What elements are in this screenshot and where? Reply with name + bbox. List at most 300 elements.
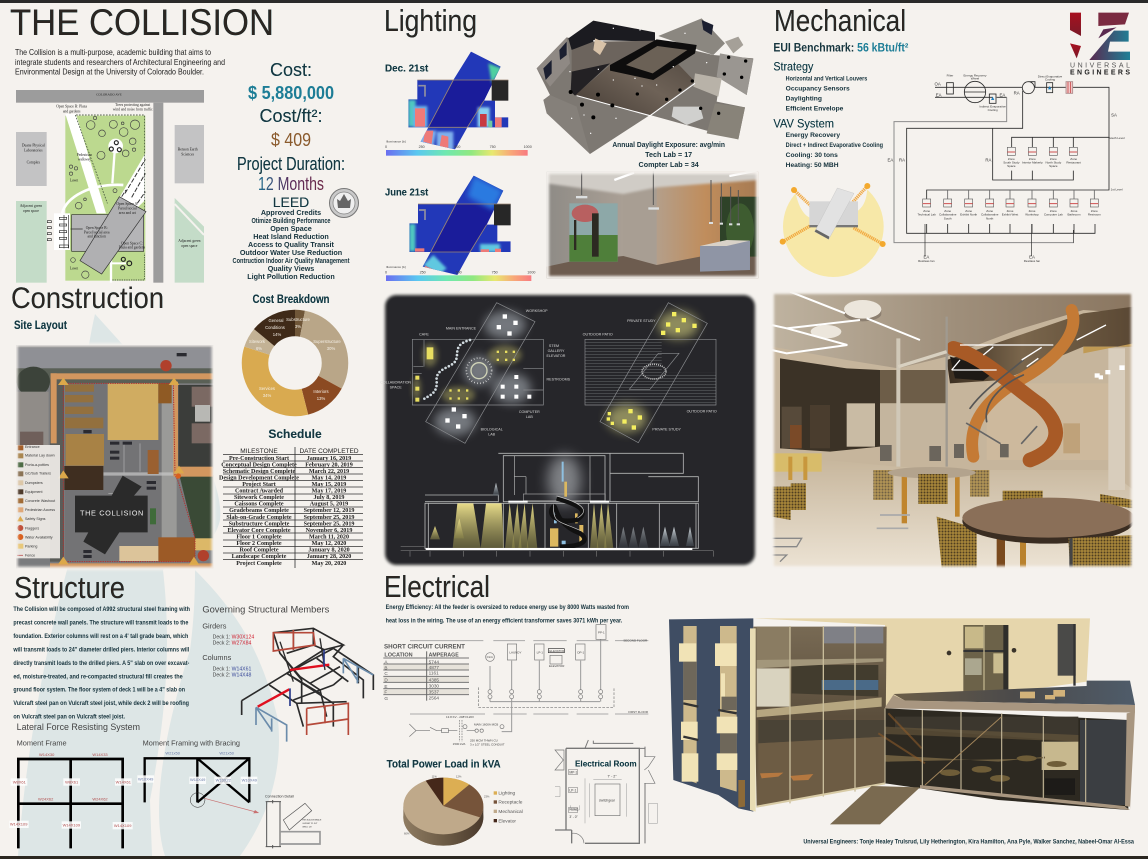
heading: Cost Breakdown: Cost Breakdown	[252, 292, 330, 306]
one-line diagram labels: DP-1	[577, 650, 584, 654]
LEED credits list: Approved Credits	[261, 208, 321, 217]
room labels: STEM	[549, 344, 559, 348]
donut chart: cost breakdown: 34%	[263, 393, 271, 398]
donut chart: cost breakdown	[249, 317, 341, 403]
energy efficiency text: Energy Efficiency: All the feeder is oversized to reduce energy use by 8000 Watts wasted from	[386, 604, 629, 611]
pie legend: Mechanical	[498, 809, 523, 815]
ceiling	[772, 292, 1133, 368]
schematic labels: Zone	[944, 209, 951, 213]
table: short circuit current: 2564	[429, 696, 439, 701]
lateral system headings	[17, 722, 240, 748]
back cream wall	[753, 618, 1090, 710]
donut chart: cost breakdown: Superstructure	[313, 339, 341, 344]
schematic labels: Zone	[965, 209, 972, 213]
room labels: COMPUTER	[519, 410, 540, 414]
site plan map: Open Space A:	[116, 202, 138, 206]
electrical room plan: MP-1	[569, 770, 577, 774]
label: December date: Dec. 21st	[385, 64, 429, 75]
room labels: SPACE	[390, 386, 402, 390]
table: short circuit current: 3030	[429, 684, 439, 689]
site plan map: Benson Earth	[178, 148, 198, 152]
upper windows	[947, 624, 1076, 692]
pie legend: Lighting	[498, 791, 516, 797]
table: project schedule: Project Complete	[236, 561, 282, 567]
table: short circuit current: 3537	[429, 689, 439, 694]
spiral stair	[953, 310, 1073, 460]
heading: Lighting: Lighting	[384, 3, 477, 38]
moment framing with bracing diagram: W10X49	[138, 777, 154, 782]
schematic labels: Space	[1049, 164, 1058, 168]
one-line diagram labels: 3 x 1/2" STEEL CONDUIT	[470, 742, 505, 746]
table: short circuit current: 1161	[429, 671, 439, 676]
electrical room plan: HVAC	[569, 808, 579, 812]
total cost value: $ 5,880,000	[248, 83, 334, 103]
schematic labels: Zone	[1007, 209, 1014, 213]
table: project schedule: January 28, 2020	[307, 554, 351, 560]
schematic labels: Zone	[986, 209, 993, 213]
electrical room plan: LP-1	[569, 789, 577, 793]
schematic labels: Zone	[1008, 157, 1015, 161]
table: project schedule: Conceptual Design Complete	[221, 462, 297, 468]
one-line diagram labels: PP-1	[598, 630, 605, 634]
table: project schedule: Slab-on-Grade Complete	[226, 515, 292, 521]
one-line diagram labels: MAIN 1600A MCB	[474, 722, 498, 726]
site plan map: Sciences	[181, 153, 195, 157]
schematic labels: Direct Evaporative	[1038, 74, 1063, 78]
panel: mechanical systems: RA	[1014, 91, 1020, 96]
structure paragraph: foundation. Exterior columns will rest on a 4' tall grade beam, which	[13, 633, 188, 640]
table: short circuit current: D	[384, 678, 388, 683]
table: project schedule	[219, 447, 363, 568]
map legend: Parking	[25, 544, 37, 548]
schematic labels	[918, 73, 1125, 263]
site plan map: Open Space B:	[86, 226, 108, 230]
governing structural members list	[202, 605, 330, 678]
site plan map: Open Space B: Plaza	[56, 104, 87, 108]
map legend: GC/Sub Trailers	[25, 472, 51, 476]
schematic labels: Zone	[1091, 209, 1098, 213]
VAV system list: VAV System	[773, 117, 834, 130]
electrical room plan	[555, 740, 657, 843]
color scale: June	[385, 265, 535, 281]
room labels: RESTROOMS	[547, 378, 571, 382]
schematic labels: Zone	[1029, 209, 1036, 213]
pie chart: total power load: 60%	[404, 832, 410, 836]
intro text block	[15, 47, 225, 76]
table: project schedule: MILESTONE	[240, 448, 278, 455]
site plan map: and function	[87, 235, 106, 239]
site plan map: Adjacent green	[20, 204, 42, 208]
panel: mechanical systems: EA	[887, 158, 893, 163]
schematic labels: Zone	[1050, 157, 1057, 161]
site plan map: Adjacent green	[178, 239, 201, 243]
one-line diagram labels: 250 MCM THWN CU	[470, 738, 498, 742]
site plan map: area and art	[119, 211, 136, 215]
site plan map: Duane Physical	[22, 144, 45, 148]
moment frame diagram: W24X62	[92, 797, 108, 802]
site plan map: wind and noise from traffic	[113, 108, 153, 112]
structure paragraph: directly transmit loads to the drilled piers. A 5" slab on over excavat-	[13, 660, 189, 667]
site plan map: open space	[181, 244, 198, 248]
3D structural frame	[242, 628, 373, 742]
moment frame diagram: W14X61	[116, 779, 132, 784]
site plan map: Trees protecting against	[115, 103, 150, 107]
table: project schedule: Design Development Complete	[219, 476, 299, 482]
LEED credits list: Quality Views	[268, 264, 314, 273]
cost label: Cost:	[270, 60, 312, 80]
map legend: Concrete Washout	[25, 499, 55, 503]
sun path building diagram	[780, 173, 886, 277]
room labels: GALLERY	[548, 349, 565, 353]
table: short circuit current: AMPERAGE	[429, 652, 459, 658]
blue side facade	[669, 618, 753, 812]
moment frame diagram: W14X33	[92, 752, 108, 757]
heading: Electrical: Electrical	[384, 569, 490, 604]
table: project schedule: Substructure Complete	[229, 522, 290, 528]
moment frame diagram: W8X61	[65, 779, 79, 784]
table: short circuit current: C	[384, 671, 388, 676]
structure paragraph: Vulcraft steel pan on Vulcraft steel joist, while deck 2 will be roofing	[13, 700, 189, 707]
structure paragraph: The Collision will be composed of A992 structural steel framing with	[13, 606, 190, 613]
moment frame diagram	[9, 752, 133, 848]
color scale: June: 750	[492, 270, 498, 274]
picture of trees	[569, 203, 618, 262]
structure paragraph: precast concrete wall panels. The structure will transmit loads to the	[13, 620, 189, 627]
color scale: December: 750	[490, 145, 496, 149]
LEED credits list: Outdoor Water Use Reduction	[240, 248, 342, 257]
table: project schedule: May 14, 2019	[312, 476, 346, 482]
governing structural members list: Governing Structural Members	[202, 605, 330, 615]
cost per square foot label: Cost/ft²:	[259, 106, 323, 126]
table: project schedule: January 16, 2019	[307, 456, 351, 462]
table: project schedule: September 25, 2019	[304, 515, 354, 521]
room labels: OUTDOOR PATIO	[687, 410, 717, 414]
table: project schedule: Roof Complete	[239, 548, 279, 554]
table: project schedule: Landscape Complete	[232, 554, 287, 560]
table: project schedule: September 12, 2019	[304, 508, 354, 514]
energy efficiency text: heat loss in the wiring. The use of an energy efficient transformer saves 3071 kWh per year.	[386, 617, 623, 624]
pie chart: total power load: 23%	[484, 794, 490, 798]
heading: Mechanical: Mechanical	[774, 3, 906, 38]
table: project schedule: September 25, 2019	[304, 522, 354, 528]
lateral system headings: Lateral Force Resisting System	[17, 722, 140, 732]
strategy list: Strategy	[773, 61, 813, 74]
dark glazing at left	[780, 358, 880, 452]
map legend: Fence	[25, 553, 35, 557]
one-line diagram labels	[446, 630, 649, 746]
LEED credits list: Access to Quality Transit	[248, 240, 335, 249]
panel: electrical system	[383, 604, 657, 846]
lateral system headings: Moment Framing with Bracing	[143, 739, 240, 748]
schematic labels: Restaurant	[1066, 160, 1081, 164]
daylight exposure caption: Annual Daylight Exposure: avg/min	[612, 141, 725, 149]
color scale: December: 500	[454, 145, 460, 149]
map legend: Safety Signs	[25, 517, 46, 521]
schematic labels: South Study	[1003, 160, 1020, 164]
entry ramp	[830, 786, 920, 824]
heading: Structure: Structure	[14, 570, 125, 605]
panel: mechanical systems: EA	[999, 93, 1005, 98]
panel: dark lighting plans and section	[380, 295, 755, 565]
one-line diagram labels: 13.8 KV - 208Y/120V	[446, 715, 474, 719]
table: project schedule: May 20, 2020	[312, 561, 346, 567]
map legend: Entrance	[25, 445, 40, 449]
connection detail: HSS 8x6x3/8 BRACE	[302, 819, 322, 822]
table: project schedule: July 8, 2019	[314, 495, 344, 501]
table: project schedule: Project Start	[242, 482, 276, 488]
schematic labels: Collaborative	[981, 213, 999, 217]
lateral system headings: Moment Frame	[17, 739, 67, 748]
LEED heading: LEED	[273, 194, 309, 210]
color scale: December: 1000	[524, 145, 532, 149]
3D model of lit floor plan	[537, 18, 753, 154]
schematic labels: Exhibit West	[1002, 213, 1018, 217]
schematic labels: Indirect Evaporative	[979, 105, 1006, 109]
site plan map: Pedestrian	[77, 153, 92, 157]
map legend: Water Availability	[25, 535, 53, 539]
site plan map: Open Space C:	[121, 241, 143, 245]
pie chart: total power load	[403, 774, 490, 846]
heading: Electrical Room: Electrical Room	[575, 759, 637, 769]
table: short circuit current: SHORT CIRCUIT CURRENT	[384, 644, 465, 651]
intro text block: integrate students and researchers of Architectural Engineering and	[15, 57, 225, 67]
table: project schedule: Floor 1 Complete	[236, 534, 282, 540]
schematic labels: South Level	[1109, 136, 1125, 140]
donut chart: cost breakdown: 30%	[327, 346, 335, 351]
daylight exposure caption: Compter Lab = 34	[639, 161, 699, 169]
table: short circuit current: 5744	[429, 659, 439, 664]
VAV system list: Direct + Indirect Evaporative Cooling	[786, 142, 883, 149]
governing structural members list: Columns	[202, 653, 232, 662]
connection detail: Connection Detail	[265, 794, 294, 798]
panel: exterior building render	[669, 618, 1135, 845]
schematic labels: Technical Lab	[918, 213, 936, 217]
VAV system list: Cooling: 30 tons	[786, 152, 838, 159]
site plan map: Complex	[27, 161, 40, 165]
bottom edge bar	[0, 856, 1148, 859]
upper back wall	[947, 307, 1133, 383]
intro text block: The Collision is a multi-purpose, academic building that aims to	[15, 47, 211, 57]
room labels: COLLABORATION	[380, 381, 411, 385]
project duration label: Project Duration:	[237, 154, 345, 174]
map legend: Pedestrian Access	[25, 508, 55, 512]
moment frame diagram: W14X109	[63, 822, 81, 827]
one-line diagram labels: FIRST FLOOR	[628, 710, 649, 714]
room labels: LAB	[526, 415, 533, 419]
site plan map: Plaza and gardens	[119, 246, 146, 250]
donut chart: cost breakdown: 13%	[317, 396, 325, 401]
strategy list: Efficient Envelope	[786, 106, 844, 113]
site plan map: COLORADO AVE	[96, 93, 122, 97]
connection detail: GUSSET PL 3/4"	[302, 823, 318, 825]
schematic labels: Exhibit North	[960, 213, 978, 217]
electrical room plan: switchgear	[599, 799, 616, 803]
schematic labels: Interior Makerlp	[1022, 160, 1043, 164]
schematic labels: Zone	[1050, 209, 1057, 213]
central volume	[575, 42, 695, 115]
LEED credits list: Open Space	[270, 224, 312, 233]
donut chart: cost breakdown: General	[269, 318, 284, 323]
dining tables and chairs	[772, 453, 1134, 570]
right single-storey glazing	[878, 708, 1135, 810]
connection detail: WELD 1/4"	[302, 826, 312, 828]
heading: Total Power Load: Total Power Load in kVA	[387, 759, 501, 771]
structure paragraph: will transmit loads to 24" diameter drilled piers. Interior columns will	[12, 646, 189, 653]
panel: mechanical systems: RA	[985, 158, 991, 163]
heading: Schedule: Schedule	[268, 427, 322, 441]
one-line diagram labels: ELEVATOR	[549, 664, 565, 668]
interior lighting render	[547, 171, 758, 278]
site plan map: Lawn	[70, 266, 78, 270]
table: short circuit current: G	[384, 696, 388, 701]
structure paragraph	[12, 606, 190, 720]
strategy list	[773, 61, 868, 113]
logo: Universal Engineers: ENGINEERS	[1070, 69, 1130, 76]
lighting plan: ground floor	[412, 303, 543, 443]
strategy list: Daylighting	[786, 96, 822, 103]
site plan map: Parcel/social	[118, 206, 137, 210]
room labels: MAIN ENTRANCE	[446, 327, 477, 331]
moment framing with bracing diagram: W10X22	[216, 778, 232, 783]
governing structural members list: Deck 2: W14X48	[213, 672, 251, 678]
table: project schedule: February 20, 2019	[305, 462, 353, 468]
lighting plan: upper floor	[585, 303, 716, 443]
icon: LEED seal	[330, 188, 358, 218]
map legend	[16, 445, 60, 558]
map legend: Porta-a-potties	[25, 463, 49, 467]
building footprint	[75, 476, 148, 554]
logo: Universal Engineers	[1070, 13, 1130, 76]
right roof terrace	[885, 681, 1135, 713]
room labels: CAFE	[419, 332, 429, 336]
table: project schedule: Contract Awarded	[235, 488, 284, 494]
color scale: December: 0	[385, 145, 387, 149]
panel: lighting studies	[385, 18, 758, 281]
schematic labels: Restroom	[1088, 213, 1101, 217]
one-line electrical diagram	[409, 625, 648, 742]
donut chart: cost breakdown: 3%	[295, 324, 301, 329]
room labels: LAB	[488, 432, 496, 436]
schematic labels: Cooling	[1045, 77, 1055, 81]
room labels: PRIVATE STUDY	[652, 427, 681, 431]
table: project schedule: March 22, 2019	[309, 469, 349, 475]
table: project schedule: Elevator Core Complete	[227, 528, 291, 534]
electrical room plan: 7' - 2"	[607, 774, 617, 778]
structure paragraph: ground floor system. The floor system of deck 1 will be a 4" slab on	[13, 687, 185, 694]
donut chart: cost breakdown: Conditions	[265, 325, 285, 330]
heading: Construction: Construction	[11, 282, 164, 315]
one-line diagram labels: SECOND FLOOR	[623, 638, 648, 642]
room labels: BIOLOGICAL	[481, 427, 503, 431]
VAV air handling schematic	[894, 81, 1109, 256]
site plan map	[16, 90, 204, 283]
donut chart: cost breakdown: 6%	[256, 346, 262, 351]
panel: mechanical systems: EA	[1029, 255, 1035, 260]
table: project schedule: August 5, 2019	[310, 502, 348, 508]
VAV system list	[773, 117, 883, 169]
table: short circuit current	[383, 644, 469, 701]
table: project schedule: Floor 2 Complete	[236, 541, 282, 547]
VAV zone boxes	[923, 147, 1098, 207]
one-line diagram labels: ELEVATOR	[549, 649, 566, 653]
panel: mechanical systems: EA	[936, 93, 942, 98]
map legend: Equipment	[25, 490, 42, 494]
table: short circuit current: LOCATION	[384, 652, 413, 658]
pie chart: total power load: 12%	[456, 774, 462, 778]
label: June date: June 21st	[385, 188, 429, 199]
governing structural members list: Girders	[202, 621, 227, 630]
map legend: Dumpsters	[25, 481, 43, 485]
panel: mechanical systems: EA	[923, 255, 929, 260]
heat map: December	[407, 50, 510, 150]
color scale: June: 0	[385, 270, 387, 274]
table: project schedule: May 17, 2019	[312, 488, 346, 494]
donut chart: cost breakdown: Sitework	[249, 339, 266, 344]
schematic labels: Energy Recovery	[964, 73, 987, 77]
moment framing with bracing diagram: W10X49	[190, 777, 206, 782]
moment frame diagram: W14X30	[39, 752, 55, 757]
LEED credits list: Otimize Building Performance	[252, 216, 331, 225]
floor	[772, 475, 1132, 568]
site plan map: Lawn	[70, 179, 78, 183]
moment frame diagram: W8X61	[13, 779, 27, 784]
intro text block: Environmental Design at the University of Colorado Boulder.	[15, 66, 204, 76]
governing structural members list: Deck 2: W27X84	[213, 641, 251, 647]
table: short circuit current: 4877	[429, 665, 439, 670]
schematic labels: North	[986, 216, 994, 220]
schematic labels: 1st Level	[1111, 188, 1123, 192]
schematic labels: Wheel	[971, 77, 980, 81]
moment framing with bracing diagram: W10X49	[242, 778, 258, 783]
map legend: Flaggers	[25, 526, 39, 530]
color scale: June: 1000	[527, 270, 535, 274]
map legend: Material Lay down	[25, 454, 55, 458]
schematic labels: Cooling	[988, 108, 998, 112]
strategy list: Occupancy Sensors	[786, 86, 850, 93]
room labels: OUTDOOR PATIO	[583, 332, 613, 336]
one-line diagram labels: LAUNDY	[509, 650, 521, 654]
schematic labels: Restlass fan	[1024, 259, 1041, 263]
energy efficiency text	[386, 604, 629, 624]
panel: structure description and diagrams	[9, 605, 373, 848]
daylight exposure caption	[612, 141, 725, 169]
structure paragraph: ed, moisture-treated, and re-compacted structural fill creates the	[13, 673, 183, 680]
logo: Universal Engineers: UNIVERSAL	[1070, 62, 1130, 69]
panel: interior atrium render	[772, 292, 1134, 570]
LEED credits list: Contruction Indoor Air Quality Management	[232, 256, 350, 265]
moment frame diagram: W24X62	[38, 797, 54, 802]
color scale: June: 500	[456, 270, 462, 274]
schematic labels: Zone	[923, 209, 930, 213]
LEED credits list: Heat Island Reduction	[253, 232, 329, 241]
site plan map: Parcel/social area	[84, 230, 110, 234]
schematic labels: North Study	[1045, 160, 1062, 164]
ceiling light fixtures	[772, 292, 1125, 379]
site plan map: open space	[23, 209, 39, 213]
waste bins	[880, 444, 1009, 461]
one-line diagram labels: 1500 kVA	[453, 742, 465, 746]
subheading: Site Layout: Site Layout	[14, 320, 67, 332]
color scale: December: Illuminance [lx]	[386, 140, 406, 144]
table: short circuit current: A	[384, 660, 388, 665]
table: short circuit current: F	[384, 690, 387, 695]
heat map: June	[407, 173, 513, 277]
site plan map: and gardens	[63, 109, 81, 113]
room labels: WORKSHOP	[526, 309, 548, 313]
structure paragraph: on Vulcraft steel pan on Vulcraft steel joist.	[13, 713, 125, 720]
site plan map: walkway	[78, 158, 91, 162]
schematic labels: Zone	[1070, 157, 1077, 161]
